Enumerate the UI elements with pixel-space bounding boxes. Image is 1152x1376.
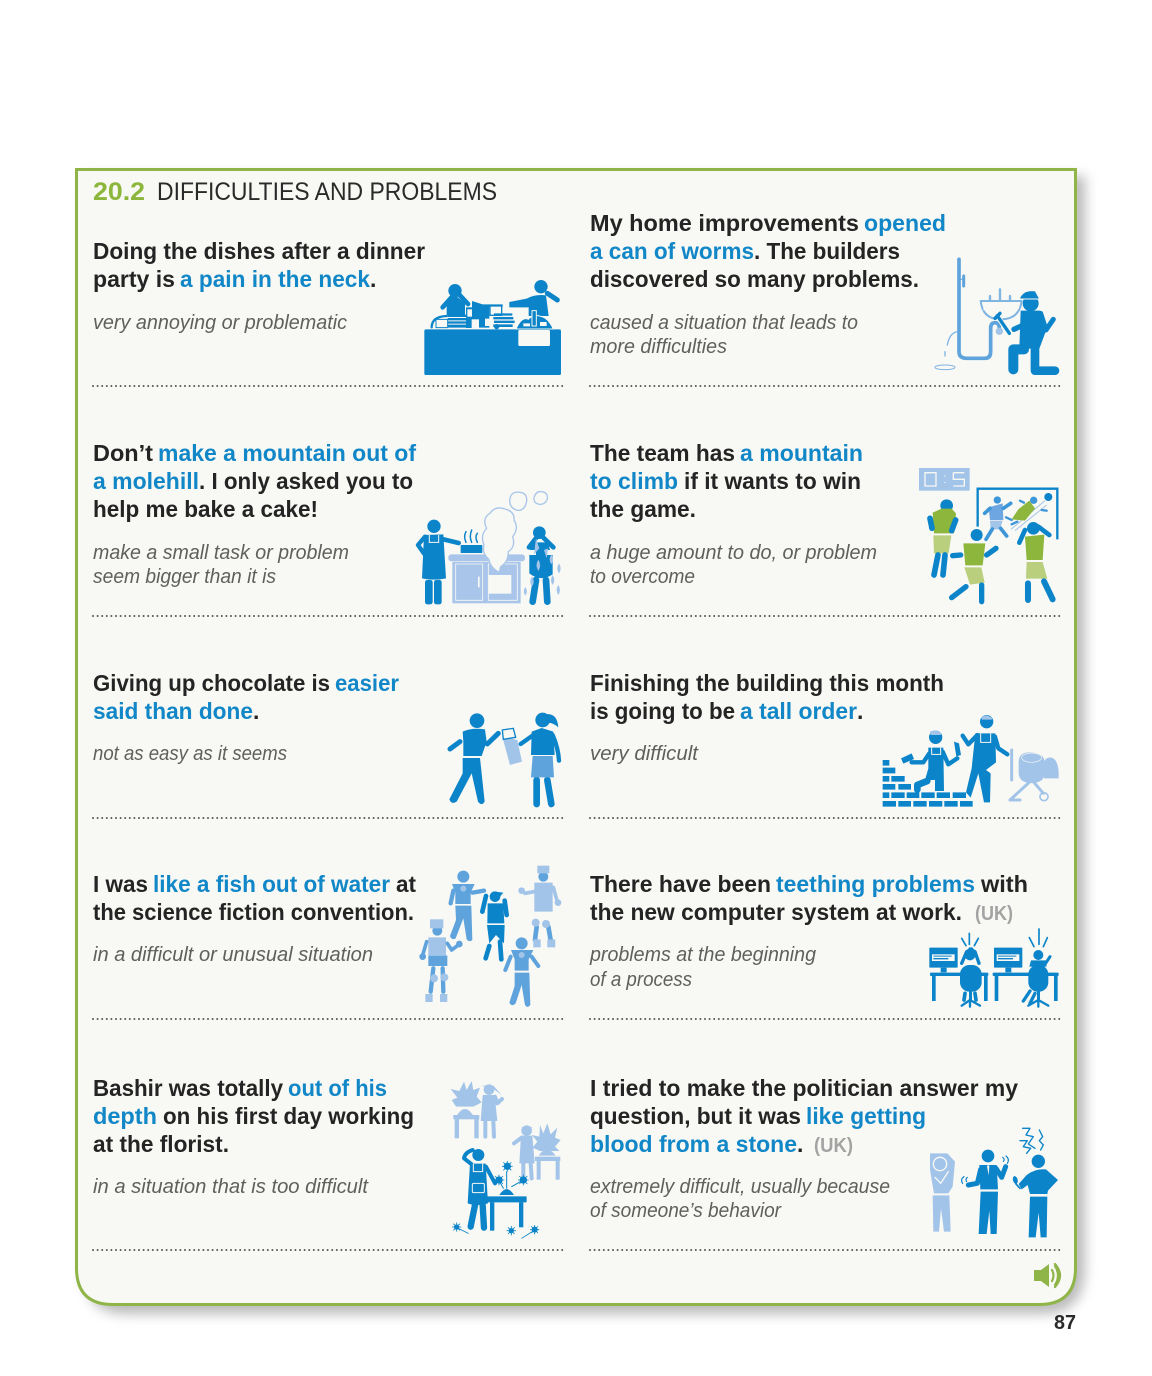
sentence: easier (335, 670, 399, 696)
definition: not as easy as it seems (93, 743, 287, 765)
definition: very annoying or problematic (93, 312, 347, 334)
definition (590, 312, 858, 358)
sentence: . The builders (754, 238, 900, 264)
icon: sci-fi convention (419, 866, 561, 1007)
sentence: a molehill (93, 468, 199, 494)
heading: DIFFICULTIES AND PROBLEMS (157, 178, 497, 206)
sentence: party is (93, 266, 175, 292)
definition: make a small task or problem (93, 542, 349, 564)
panel: a pain in the neck (93, 238, 561, 375)
sentence: at (396, 871, 416, 897)
definition: of a process (590, 969, 692, 991)
sentence (590, 871, 1028, 925)
sentence: out of his (288, 1075, 387, 1101)
sentence: . I only asked you to (199, 468, 413, 494)
sentence: at the florist. (93, 1131, 229, 1157)
definition: a huge amount to do, or problem (590, 542, 877, 564)
panel: easier said than done (93, 670, 559, 804)
sentence: blood from a stone (590, 1131, 797, 1157)
icon: speaker (1034, 1264, 1060, 1287)
sentence: I was (93, 871, 148, 897)
definition: seem bigger than it is (93, 566, 276, 588)
sentence: My home improvements (590, 210, 859, 236)
definition: problems at the beginning (589, 944, 816, 966)
sentence: There have been (590, 871, 771, 897)
definition: very difficult (590, 743, 699, 765)
panel: like getting blood from a stone (590, 1075, 1058, 1237)
sentence: with (980, 871, 1028, 897)
sentence: question, but it was (590, 1103, 801, 1129)
sentence: said than done (93, 698, 253, 724)
sentence (590, 670, 944, 724)
sentence: . (370, 266, 376, 292)
panel: out of his depth (93, 1075, 561, 1238)
sentence: . (253, 698, 259, 724)
sentence: depth (93, 1103, 157, 1129)
sentence: discovered so many problems. (590, 266, 919, 292)
sentence: the game. (590, 496, 696, 522)
panel: opened a can of worms (590, 210, 1055, 371)
definition (590, 1176, 890, 1222)
icon: builders laying bricks (883, 715, 1059, 807)
sentence: is going to be (590, 698, 735, 724)
sentence: . (857, 698, 863, 724)
sentence (590, 1075, 1018, 1157)
sentence (93, 670, 399, 724)
definition (93, 542, 349, 588)
sentence: a tall order (740, 698, 857, 724)
definition (590, 542, 877, 588)
icon: losing football team (919, 468, 1057, 602)
sentence: the new computer system at work. (590, 899, 962, 925)
sentence: Doing the dishes after a dinner (93, 238, 425, 264)
sentence (590, 440, 863, 522)
sentence: (UK) (814, 1135, 853, 1157)
sentence: Bashir was totally (93, 1075, 283, 1101)
definition: to overcome (590, 566, 695, 588)
definition: extremely difficult, usually because (590, 1176, 890, 1198)
sentence: a can of worms (590, 238, 754, 264)
sentence: The team has (590, 440, 735, 466)
panel: like a fish out of water (93, 866, 561, 1007)
sentence: to climb (590, 468, 678, 494)
sentence: (UK) (975, 903, 1013, 925)
sentence: a pain in the neck (180, 266, 370, 292)
definition: in a difficult or unusual situation (93, 944, 373, 966)
sentence (93, 440, 416, 522)
panel: teething problems (589, 871, 1059, 1007)
sentence: Don’t (93, 440, 153, 466)
panel: make a mountain out of a molehill (93, 440, 561, 604)
sentence: if it wants to win (684, 468, 861, 494)
icon: washing dishes (424, 280, 561, 375)
sentence: opened (864, 210, 946, 236)
heading: 20.2 (93, 178, 145, 206)
sentence: Finishing the building this month (590, 670, 944, 696)
sentence: I tried to make the politician answer my (590, 1075, 1018, 1101)
panel: card background (76, 170, 1085, 1314)
sentence: like a fish out of water (153, 871, 390, 897)
icon: florists (451, 1081, 561, 1238)
icon: reporter and politician (930, 1128, 1058, 1237)
sentence: on his first day working (163, 1103, 414, 1129)
sentence (93, 1075, 414, 1157)
page number: 87 (1054, 1312, 1076, 1334)
definition: more difficulties (590, 336, 727, 358)
definition: of someone’s behavior (590, 1200, 782, 1222)
sentence: make a mountain out of (158, 440, 416, 466)
panel: a tall order (590, 670, 1059, 807)
icon: refusing chocolate (449, 713, 559, 804)
sentence: teething problems (776, 871, 975, 897)
sentence: Giving up chocolate is (93, 670, 330, 696)
sentence: a mountain (740, 440, 863, 466)
icon: smoking oven (418, 492, 561, 604)
sentence: help me bake a cake! (93, 496, 318, 522)
icon: plumber (935, 259, 1055, 371)
sentence: like getting (806, 1103, 926, 1129)
sentence (93, 238, 425, 292)
sentence: the science fiction convention. (93, 899, 414, 925)
definition: caused a situation that leads to (590, 312, 858, 334)
definition (589, 944, 816, 991)
panel: a mountain to climb (590, 440, 1057, 602)
sentence (590, 210, 946, 292)
sentence (93, 871, 416, 925)
goalkeeper and defender (985, 496, 1047, 539)
icon: office workers with broken computers (929, 929, 1059, 1007)
definition: in a situation that is too difficult (93, 1176, 369, 1198)
sentence: . (797, 1131, 803, 1157)
